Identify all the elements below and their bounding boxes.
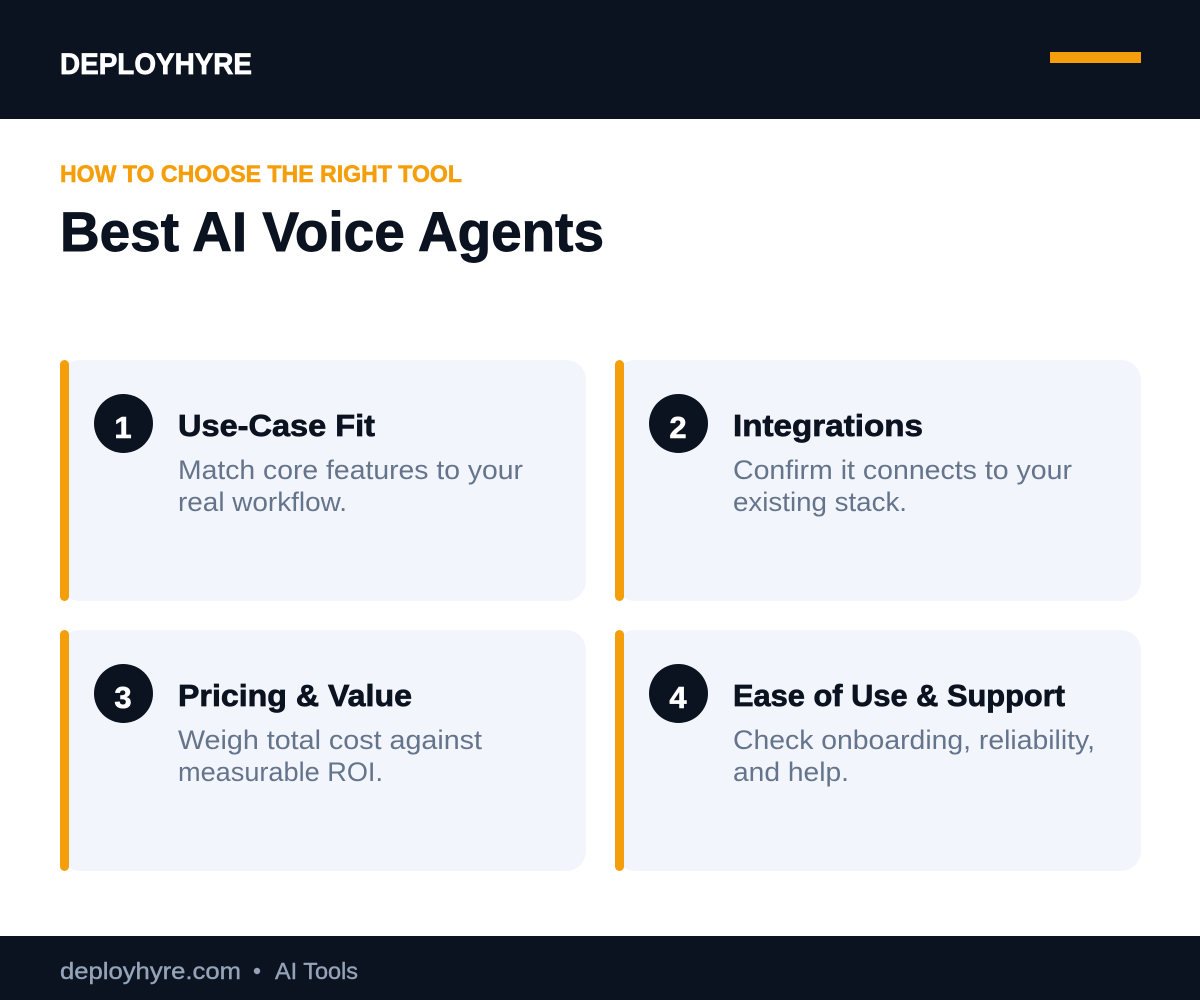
header accent bar	[1050, 52, 1141, 63]
header band	[0, 0, 1200, 119]
panel: use-case fit: 1	[114, 410, 132, 445]
panel: ease of use and support: Ease of Use & Support	[733, 678, 1065, 713]
panel: use-case fit: Match core features to your	[178, 455, 523, 485]
panel: integrations: Integrations	[733, 408, 923, 443]
panel: ease of use and support	[615, 630, 1141, 871]
footer band	[0, 936, 1200, 1000]
kicker heading: HOW TO CHOOSE THE RIGHT TOOL	[60, 161, 462, 188]
panel: pricing and value: Pricing & Value	[178, 678, 412, 713]
panel: use-case fit: real workflow.	[178, 487, 347, 517]
panel: integrations: Confirm it connects to your	[733, 455, 1072, 485]
footer text	[60, 958, 358, 984]
footer text: AI Tools	[275, 958, 358, 984]
panel: ease of use and support: 4	[669, 680, 687, 715]
panel: pricing and value: Weigh total cost against	[178, 725, 483, 755]
panel: integrations	[615, 360, 1141, 601]
panel: ease of use and support: Check onboarding, reliability,	[733, 725, 1095, 755]
panel: integrations: existing stack.	[733, 487, 907, 517]
panel: use-case fit	[60, 360, 586, 601]
panel: pricing and value: measurable ROI.	[178, 757, 383, 787]
panel: ease of use and support: and help.	[733, 757, 849, 787]
panel: pricing and value	[60, 630, 586, 871]
panel: pricing and value: 3	[114, 680, 132, 715]
title: Best AI Voice Agents	[60, 200, 604, 263]
brand wordmark: DEPLOYHYRE	[60, 48, 252, 81]
panel: integrations: 2	[669, 410, 687, 445]
panel: use-case fit: Use-Case Fit	[178, 408, 375, 443]
footer text: deployhyre.com	[60, 958, 241, 984]
